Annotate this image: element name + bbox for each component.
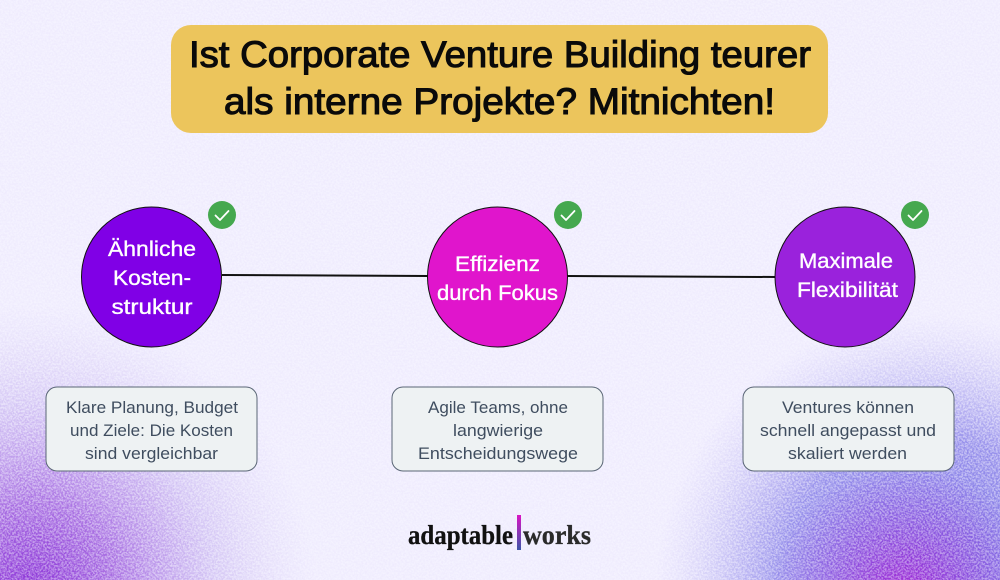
- title text: [189, 34, 811, 122]
- text box: Klare Planung: Klare Planung, Budget: [66, 398, 238, 417]
- node: Ähnliche Kostenstruktur: [82, 207, 222, 347]
- node: Maximale Flexibilität: Maximale: [799, 250, 893, 273]
- text box: Agile Teams: Agile Teams, ohne: [428, 398, 568, 417]
- node: Effizienz durch Fokus: Effizienz: [455, 253, 540, 276]
- text box: Ventures: skaliert werden: [788, 444, 907, 463]
- node: Maximale Flexibilität: [775, 207, 915, 347]
- text box: Ventures: Ventures können: [782, 398, 914, 417]
- node: Effizienz durch Fokus: durch Fokus: [437, 282, 558, 305]
- text box: Ventures: schnell angepasst und: [760, 421, 936, 440]
- icon: check badge 2: [554, 201, 582, 229]
- node: Ähnliche Kostenstruktur: Ähnliche: [108, 238, 196, 261]
- title banner: [171, 25, 828, 133]
- logo: adaptable works: [408, 515, 591, 550]
- title text: als interne Projekte? Mitnichten!: [224, 81, 775, 122]
- node: Effizienz durch Fokus: [428, 207, 568, 347]
- text box: Agile Teams: [392, 387, 603, 471]
- text box: Agile Teams: langwierige: [453, 421, 543, 440]
- node: Maximale Flexibilität: Flexibilität: [797, 279, 898, 302]
- icon: check badge 3: [901, 201, 929, 229]
- connector line: second to third circle: [567, 276, 776, 277]
- connector line: first to second circle: [222, 275, 428, 276]
- node: Ähnliche Kostenstruktur: Kosten-: [113, 267, 191, 290]
- logo: adaptable works: works: [523, 520, 591, 550]
- text box: Ventures: [743, 387, 954, 471]
- text box: Klare Planung: [46, 387, 257, 471]
- title text: Ist Corporate Venture Building teurer: [189, 34, 811, 75]
- text box: Klare Planung: und Ziele: Die Kosten: [70, 421, 233, 440]
- logo: adaptable works: adaptable: [408, 520, 513, 550]
- node: Ähnliche Kostenstruktur: struktur: [112, 296, 193, 319]
- icon: check badge 1: [208, 201, 236, 229]
- text box: Agile Teams: Entscheidungswege: [418, 444, 578, 463]
- text box: Klare Planung: sind vergleichbar: [85, 444, 218, 463]
